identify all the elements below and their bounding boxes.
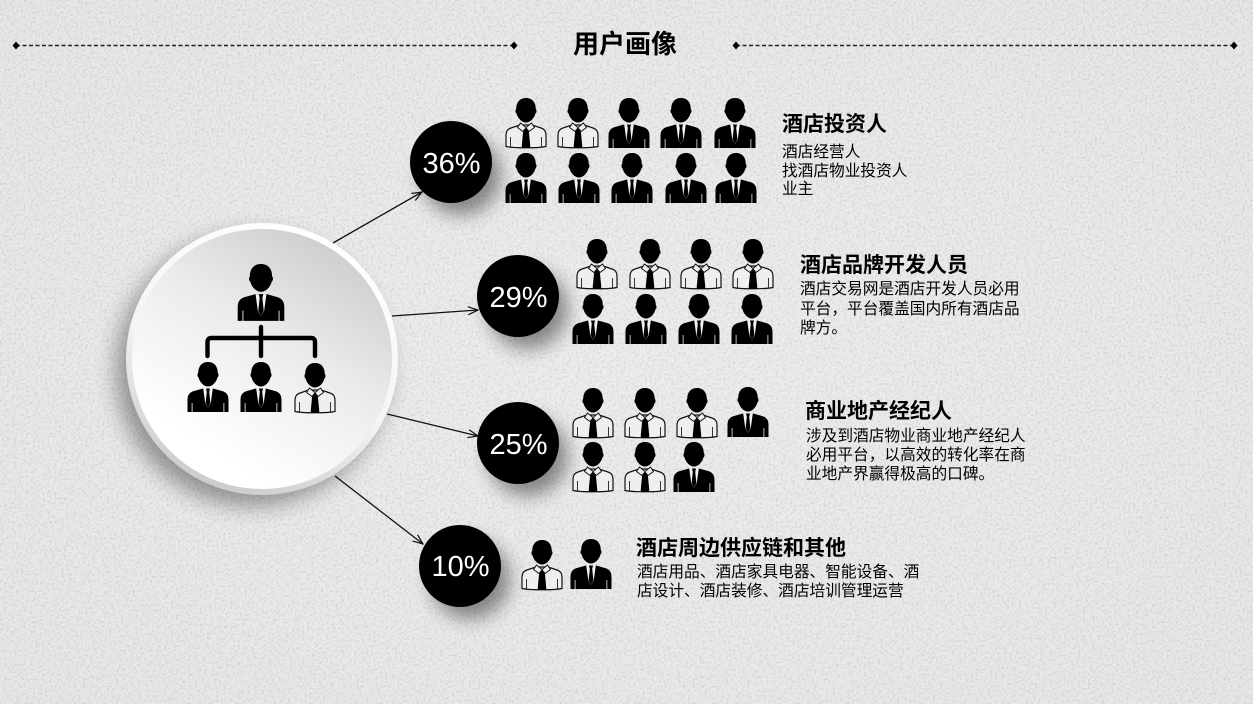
title: 用户画像: [573, 29, 677, 59]
text block: commercial real estate brokers: 涉及到酒店物业商业地产经纪人: [806, 427, 1026, 445]
badge: 25%: 25%: [489, 429, 548, 461]
badge: 29%: [477, 255, 568, 349]
arrow to 29%: [392, 310, 478, 316]
people icons: 36%: [506, 98, 756, 203]
people icons: 25%: [573, 387, 768, 492]
text block: hotel brand developers: [800, 254, 1020, 337]
right dashed divider: [732, 42, 1238, 50]
text block: hotel investors: 业主: [782, 180, 813, 198]
text block: suppliers and others: 酒店用品、酒店家具电器、智能设备、酒: [637, 563, 919, 581]
text block: hotel investors: 酒店经营人: [782, 143, 861, 161]
badge: 10%: 10%: [431, 551, 490, 583]
text block: commercial real estate brokers: 必用平台，以高效的转化率在商: [806, 446, 1026, 464]
arrow to 10%: [335, 476, 423, 544]
text block: hotel brand developers: 酒店品牌开发人员: [800, 254, 968, 277]
badge: 10%: [419, 525, 510, 619]
people icons: 10%: [522, 539, 612, 590]
badge: 36%: 36%: [422, 148, 481, 180]
text block: hotel brand developers: 酒店交易网是酒店开发人员必用: [800, 280, 1020, 298]
text block: suppliers and others: 酒店周边供应链和其他: [636, 536, 846, 560]
icon: org chart: [188, 264, 335, 413]
people icons: 29%: [572, 239, 773, 344]
text block: commercial real estate brokers: 商业地产经纪人: [805, 400, 952, 423]
badge: 36%: [410, 121, 501, 215]
arrow to 36%: [333, 192, 422, 243]
badge: 25%: [477, 402, 568, 496]
text block: suppliers and others: [636, 536, 919, 600]
text block: hotel investors: 酒店投资人: [782, 113, 887, 136]
text block: hotel investors: [782, 113, 908, 198]
text block: commercial real estate brokers: 业地产界赢得极高的口碑。: [806, 465, 994, 483]
badge: 29%: 29%: [489, 282, 548, 314]
arrow to 25%: [387, 414, 478, 436]
text block: suppliers and others: 店设计、酒店装修、酒店培训管理运营: [637, 582, 904, 600]
text block: commercial real estate brokers: [805, 400, 1026, 483]
text block: hotel investors: 找酒店物业投资人: [782, 162, 908, 180]
text block: hotel brand developers: 牌方。: [800, 319, 847, 337]
central circle with org chart: [116, 223, 398, 506]
left dashed divider: [12, 42, 518, 50]
text block: hotel brand developers: 平台，平台覆盖国内所有酒店品: [800, 300, 1020, 318]
